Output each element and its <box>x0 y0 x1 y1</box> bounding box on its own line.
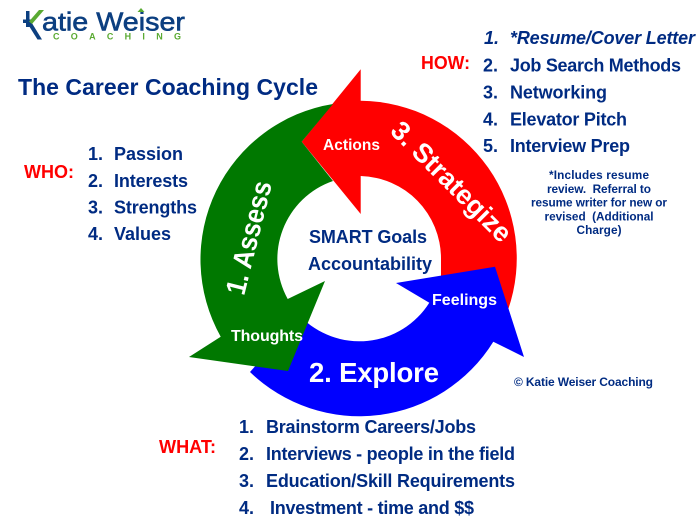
label: Actions: Actions <box>323 137 380 154</box>
logo: Katie Weiser Coaching: atie Weiser <box>42 6 185 36</box>
what list: 4. <box>239 498 254 518</box>
cycle diagram <box>189 69 524 416</box>
how list: 1. <box>484 28 499 48</box>
how list: 4. <box>483 110 498 130</box>
who list: Passion <box>114 144 183 164</box>
how list: Networking <box>510 82 607 102</box>
what label: WHAT: <box>159 437 216 457</box>
how list: 3. <box>483 82 498 102</box>
center text: SMART Goals: SMART Goals <box>309 227 427 247</box>
center text: Accountability: Accountability <box>308 254 432 274</box>
what list: 2. <box>239 444 254 464</box>
logo: Katie Weiser Coaching: COACHING <box>53 32 181 42</box>
who list: Strengths <box>114 198 197 218</box>
how list: 2. <box>483 56 498 76</box>
what list: Brainstorm Careers/Jobs <box>266 417 476 437</box>
title: The Career Coaching Cycle <box>18 74 318 100</box>
how list: Job Search Methods <box>510 56 681 76</box>
label: 1. Assess: 1. Assess <box>220 178 278 298</box>
arrow: explore blue <box>250 267 524 416</box>
arrow: strategize red <box>302 69 517 310</box>
what list <box>239 417 515 518</box>
how list: *Resume/Cover Letter <box>510 28 696 48</box>
logo: Katie Weiser Coaching <box>23 6 185 42</box>
arrow: assess green <box>189 104 333 371</box>
what list: 3. <box>239 471 254 491</box>
copyright: © Katie Weiser Coaching <box>514 375 653 389</box>
resume footnote: *Includes resume <box>549 168 649 182</box>
label: Thoughts: Thoughts <box>231 328 303 345</box>
resume footnote: Charge) <box>576 223 622 237</box>
how label: HOW: <box>421 53 470 73</box>
how list <box>483 28 696 156</box>
label: Feelings: Feelings <box>432 292 497 309</box>
who list: 3. <box>88 198 103 218</box>
who label: WHO: <box>24 162 74 182</box>
who list: Interests <box>114 171 188 191</box>
how list: 5. <box>483 136 498 156</box>
what list: Interviews - people in the field <box>266 444 515 464</box>
what list: Investment - time and $$ <box>270 498 474 518</box>
resume footnote <box>531 168 667 237</box>
resume footnote: revised (Additional <box>544 210 654 224</box>
how list: Elevator Pitch <box>510 110 627 130</box>
how list: Interview Prep <box>510 136 630 156</box>
label: 3. Strategize: 3. Strategize <box>385 115 518 248</box>
who list <box>88 144 197 244</box>
label: 2. Explore: 2. Explore <box>309 357 439 388</box>
who list: Values <box>114 224 171 244</box>
who list: 1. <box>88 144 103 164</box>
what list: 1. <box>239 417 254 437</box>
resume footnote: resume writer for new or <box>531 196 667 210</box>
what list: Education/Skill Requirements <box>266 471 515 491</box>
who list: 4. <box>88 224 103 244</box>
who list: 2. <box>88 171 103 191</box>
resume footnote: review. Referral to <box>547 182 651 196</box>
